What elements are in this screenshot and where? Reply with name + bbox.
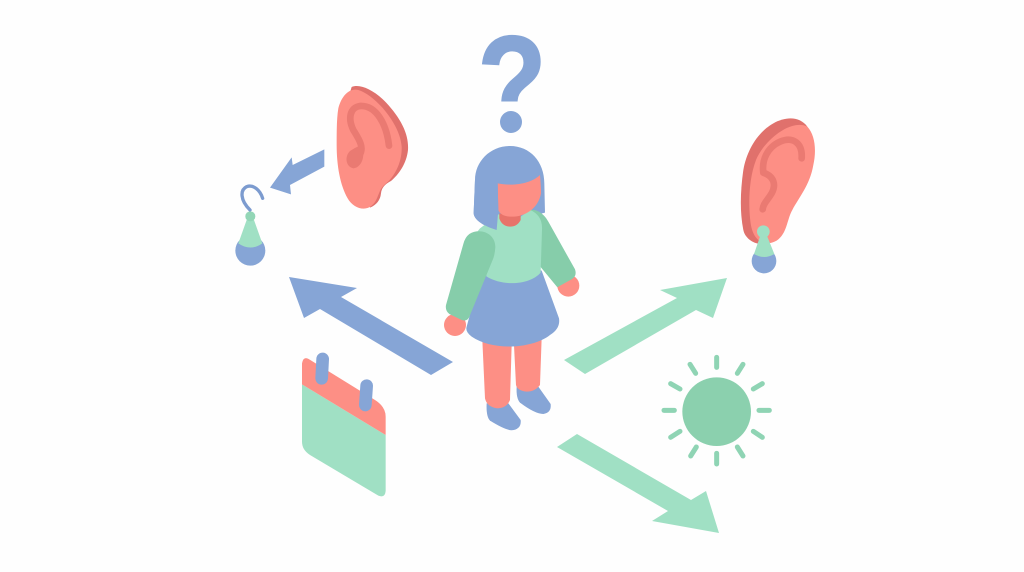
small blue arrow xyxy=(270,149,324,194)
ear right earring bead xyxy=(757,225,770,238)
sun disc xyxy=(682,377,751,446)
question mark dot xyxy=(500,111,522,133)
face xyxy=(498,175,541,217)
sun icon xyxy=(664,357,769,464)
left hand xyxy=(444,314,466,336)
question mark xyxy=(482,34,541,133)
hair front lock xyxy=(474,180,498,230)
ear right front xyxy=(749,125,815,243)
torso xyxy=(473,210,542,283)
earring hook xyxy=(242,186,263,210)
right shoe xyxy=(517,387,551,414)
right leg xyxy=(514,338,542,392)
person figure xyxy=(444,146,579,430)
earring cone xyxy=(238,220,262,247)
ear right earring drop xyxy=(752,249,776,273)
ear left with earring and arrow xyxy=(235,86,408,266)
large green arrow down right xyxy=(557,434,719,533)
calendar icon xyxy=(302,358,386,496)
calendar header xyxy=(302,358,386,435)
skirt xyxy=(466,253,559,347)
ear left canal xyxy=(347,146,363,168)
right hand xyxy=(557,275,579,297)
ear right back edge xyxy=(741,118,807,244)
large blue arrow up left xyxy=(289,277,453,375)
ear right inner fold xyxy=(763,140,802,209)
infographic canvas xyxy=(235,34,815,533)
calendar body xyxy=(302,384,386,496)
large green arrow up right xyxy=(564,278,727,374)
earring drop xyxy=(235,236,265,266)
left leg xyxy=(482,340,512,408)
right arm xyxy=(528,210,576,287)
hair back xyxy=(474,146,545,230)
ear right with earring xyxy=(741,118,815,273)
ear right earring cone xyxy=(754,237,774,257)
ear left back edge xyxy=(345,86,408,208)
question mark hook: ? xyxy=(478,8,546,156)
calendar ring left xyxy=(303,359,342,378)
ear left inner fold xyxy=(350,106,389,154)
left arm xyxy=(446,231,495,320)
calendar ring right xyxy=(365,386,367,405)
ear left front xyxy=(337,90,402,209)
left shoe xyxy=(487,403,521,430)
earring bead xyxy=(245,211,255,221)
neck xyxy=(499,213,521,227)
sun rays xyxy=(664,357,769,464)
